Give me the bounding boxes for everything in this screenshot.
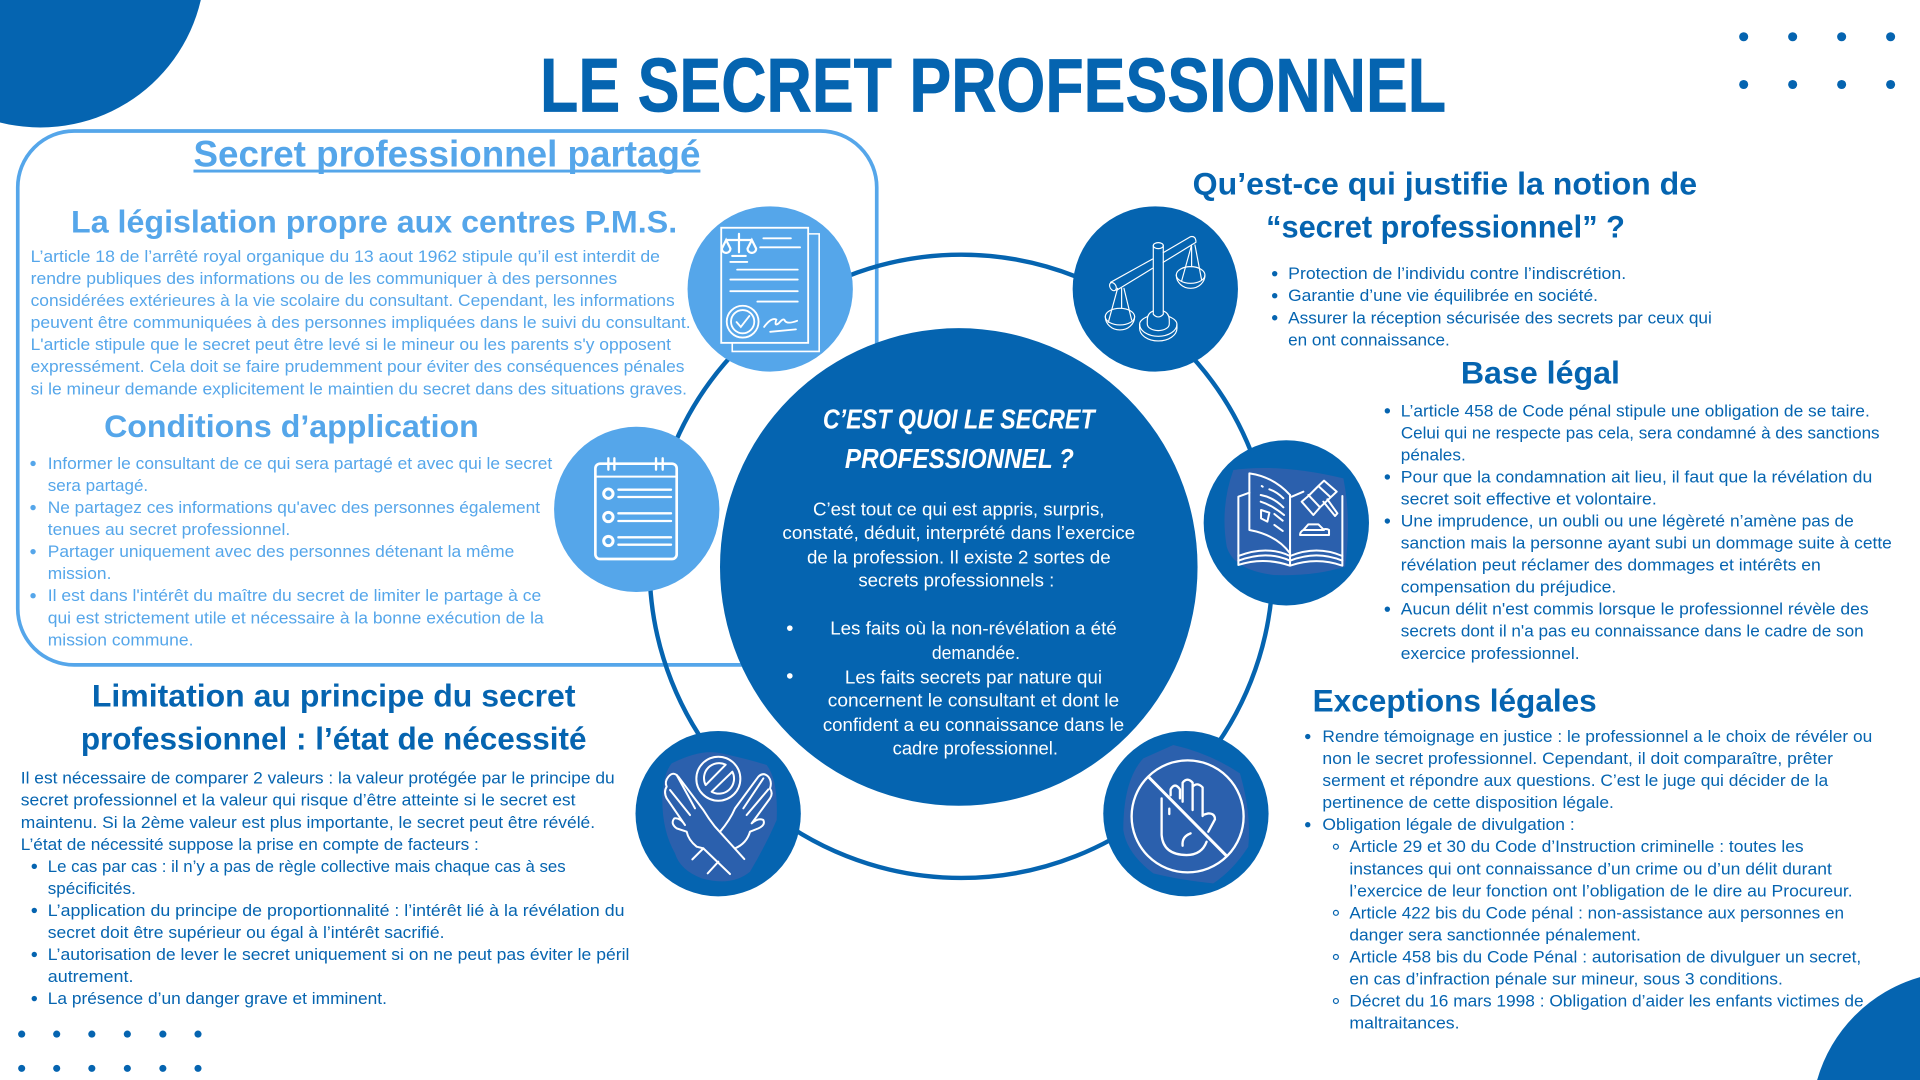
- list: conditions: sera partagé.: [48, 476, 148, 495]
- icon: crossed hands: [636, 731, 801, 896]
- ring connecting the circles: [650, 255, 1273, 878]
- list: base légal: Aucun délit n'est commis lorsque le professionnel révèle des: [1401, 600, 1869, 619]
- list: exceptions: non le secret professionnel. Cependant, il doit comparaître, prêter: [1322, 749, 1833, 768]
- text block: législation: si le mineur demande explicitement le maintien du secret dans des situations graves.: [31, 379, 687, 398]
- central definition text: [782, 500, 1135, 591]
- list: exceptions: Obligation légale de divulgation :: [1322, 815, 1575, 834]
- list: base légal: Pour que la condamnation ait lieu, il faut que la révélation du: [1401, 467, 1872, 486]
- heading: justification: “secret professionnel” ?: [1266, 209, 1625, 245]
- list: base légal: L’article 458 de Code pénal stipule une obligation de se taire.: [1401, 401, 1870, 420]
- text block: législation: expressément. Cela doit se faire prudemment pour éviter des conséquences pénales: [31, 357, 684, 376]
- sub-list: exceptions: Article 422 bis du Code pénal : non-assistance aux personnes en: [1349, 903, 1844, 922]
- list: base légal: Celui qui ne respecte pas cela, sera condamné à des sanctions: [1401, 423, 1880, 442]
- list: limitation: Le cas par cas : il n’y a pas de règle collective mais chaque cas à ses: [48, 857, 566, 876]
- heading: secret professionnel partagé: Secret professionnel partagé: [193, 134, 700, 175]
- icon: legal document: [688, 206, 853, 372]
- icon: forbidden hand: [1103, 731, 1269, 896]
- list: conditions: mission.: [48, 564, 111, 583]
- text block: limitation: L’état de nécessité suppose la prise en compte de facteurs :: [21, 835, 479, 854]
- central definition text: constaté, déduit, interprété dans l’exercice: [782, 523, 1135, 543]
- central heading: C’EST QUOI LE SECRET: [823, 404, 1097, 435]
- sub-list: exceptions: maltraitances.: [1349, 1014, 1460, 1033]
- icon: law book and gavel: [1204, 440, 1369, 606]
- text block: limitation: [21, 769, 615, 854]
- central heading: PROFESSIONNEL ?: [845, 443, 1074, 474]
- text block: législation: rendre publiques des informations ou de les communiquer à des personnes: [31, 269, 617, 288]
- central list: cadre professionnel.: [893, 738, 1058, 758]
- text block: limitation: Il est nécessaire de comparer 2 valeurs : la valeur protégée par le principe du: [21, 769, 615, 788]
- list: exceptions: Rendre témoignage en justice : le professionnel a le choix de révéler ou: [1322, 727, 1872, 746]
- central list: demandée.: [932, 643, 1020, 663]
- list: base légal: révélation peut réclamer des dommages et intérêts en: [1401, 556, 1821, 575]
- list: base légal: Une imprudence, un oubli ou une légèreté n’amène pas de: [1401, 512, 1854, 531]
- list: base légal: secrets dont il n'a pas eu connaissance dans le cadre de son: [1401, 622, 1864, 641]
- list: limitation: La présence d’un danger grave et imminent.: [48, 989, 387, 1008]
- central list: confident a eu connaissance dans le: [823, 715, 1124, 735]
- list: base légal: pénales.: [1401, 445, 1466, 464]
- panel: exceptions légales: [1305, 682, 1872, 1033]
- heading: limitation: [81, 678, 587, 756]
- corner shape: bottom right: [1817, 977, 1920, 1080]
- dots: top right: [1739, 32, 1895, 89]
- list: conditions: Il est dans l'intérêt du maître du secret de limiter le partage à ce: [48, 586, 541, 605]
- central list: Les faits où la non-révélation a été: [830, 618, 1117, 638]
- sub-list: exceptions: instances qui ont connaissance d’un crime ou d’un délit durant: [1349, 859, 1832, 878]
- heading: justification: Qu’est-ce qui justifie la notion de: [1193, 166, 1697, 202]
- list: limitation: L’autorisation de lever le secret uniquement si on ne peut pas éviter le péril: [48, 945, 629, 964]
- list: limitation: L’application du principe de proportionnalité : l’intérêt lié à la révélation du: [48, 901, 624, 920]
- icon: scales of justice: [1073, 206, 1238, 372]
- central definition text: secrets professionnels :: [858, 571, 1054, 591]
- list: limitation: spécificités.: [48, 879, 136, 898]
- list: conditions: qui est strictement utile et nécessaire à la bonne exécution de la: [48, 608, 544, 627]
- panel: base légal: [1385, 354, 1892, 663]
- text block: législation: considérées extérieures à la vie scolaire du consultant. Cependant, les informations: [31, 291, 675, 310]
- central disc: [720, 328, 1198, 806]
- list: conditions: Ne partagez ces informations qu'avec des personnes également: [48, 498, 540, 517]
- text block: législation: L'article stipule que le secret peut être levé si le mineur ou les parents s'y opposent: [31, 335, 671, 354]
- list: exceptions: pertinence de cette disposition légale.: [1322, 793, 1614, 812]
- heading: justification: [1193, 166, 1697, 245]
- list: base légal: compensation du préjudice.: [1401, 578, 1616, 597]
- list: justification: en ont connaissance.: [1288, 330, 1450, 349]
- heading: exceptions légales: Exceptions légales: [1313, 682, 1597, 718]
- list: limitation: autrement.: [48, 967, 133, 986]
- list: conditions: Informer le consultant de ce qui sera partagé et avec qui le secret: [48, 454, 553, 473]
- panel: central circle: [720, 328, 1198, 806]
- heading: limitation: Limitation au principe du secret: [92, 678, 576, 714]
- list: base légal: [1385, 401, 1892, 663]
- sub-list: exceptions: [1333, 837, 1864, 1033]
- text block: législation: L’article 18 de l’arrêté royal organique du 13 aout 1962 stipule qu’il est interdit de: [31, 247, 660, 266]
- central list: Les faits secrets par nature qui: [845, 667, 1102, 687]
- heading: législation: La législation propre aux centres P.M.S.: [71, 204, 677, 240]
- list: limitation: secret doit être supérieur ou égal à l’intérêt sacrifié.: [48, 923, 444, 942]
- sub-list: exceptions: danger sera sanctionnée pénalement.: [1349, 925, 1641, 944]
- list: exceptions: [1305, 727, 1872, 834]
- list: conditions: tenues au secret professionnel.: [48, 520, 290, 539]
- sub-list: exceptions: Décret du 16 mars 1998 : Obligation d’aider les enfants victimes de: [1349, 992, 1864, 1011]
- central list: [787, 618, 1124, 758]
- text block: limitation: maintenu. Si la 2ème valeur est plus importante, le secret peut être révélé.: [21, 813, 595, 832]
- list: justification: [1272, 264, 1712, 349]
- heading: base légal: Base légal: [1461, 354, 1620, 390]
- central list: concernent le consultant et dont le: [828, 691, 1119, 711]
- text block: législation: [31, 247, 691, 398]
- sub-list: exceptions: en cas d’infraction pénale sur mineur, sous 3 conditions.: [1349, 969, 1783, 988]
- list: justification: Protection de l’individu contre l’indiscrétion.: [1288, 264, 1626, 283]
- list: conditions: mission commune.: [48, 630, 193, 649]
- list: exceptions: serment et répondre aux questions. C’est le juge qui décider de la: [1322, 771, 1829, 790]
- list: justification: Garantie d’une vie équilibrée en société.: [1288, 286, 1598, 305]
- panel: limitation: [21, 678, 629, 1008]
- title: LE SECRET PROFESSIONNEL: [540, 43, 1446, 128]
- corner shape: top left: [0, 0, 201, 127]
- text block: limitation: secret professionnel et la valeur qui risque d’être atteinte si le secret est: [21, 791, 576, 810]
- sub-list: exceptions: Article 458 bis du Code Pénal : autorisation de divulguer un secret,: [1349, 947, 1861, 966]
- panel: secret professionnel partagé content: [30, 134, 700, 649]
- sub-list: exceptions: l’exercice de leur fonction ont l’obligation de le dire au Procureur.: [1349, 881, 1853, 900]
- panel: justification: [1193, 166, 1712, 349]
- list: conditions: Partager uniquement avec des personnes détenant la même: [48, 542, 514, 561]
- icon: checklist calendar: [554, 427, 719, 592]
- central definition text: de la profession. Il existe 2 sortes de: [807, 547, 1111, 567]
- central heading: [823, 404, 1097, 474]
- heading: conditions: Conditions d’application: [104, 408, 479, 444]
- list: base légal: sanction mais la personne ayant subi un dommage suite à cette: [1401, 534, 1892, 553]
- sub-list: exceptions: Article 29 et 30 du Code d’Instruction criminelle : toutes les: [1349, 837, 1804, 856]
- dots: bottom left: [18, 1031, 202, 1072]
- central definition text: C’est tout ce qui est appris, surpris,: [813, 500, 1104, 520]
- panel: secret professionnel partagé frame: [18, 131, 877, 665]
- list: conditions: [30, 454, 553, 649]
- list: justification: Assurer la réception sécurisée des secrets par ceux qui: [1288, 308, 1712, 327]
- text block: législation: peuvent être communiquées à des personnes impliquées dans le suivi du consultant.: [31, 313, 691, 332]
- list: limitation: [32, 857, 629, 1008]
- list: base légal: exercice professionnel.: [1401, 644, 1580, 663]
- heading: limitation: professionnel : l’état de nécessité: [81, 720, 587, 756]
- list: base légal: secret soit effective et volontaire.: [1401, 489, 1657, 508]
